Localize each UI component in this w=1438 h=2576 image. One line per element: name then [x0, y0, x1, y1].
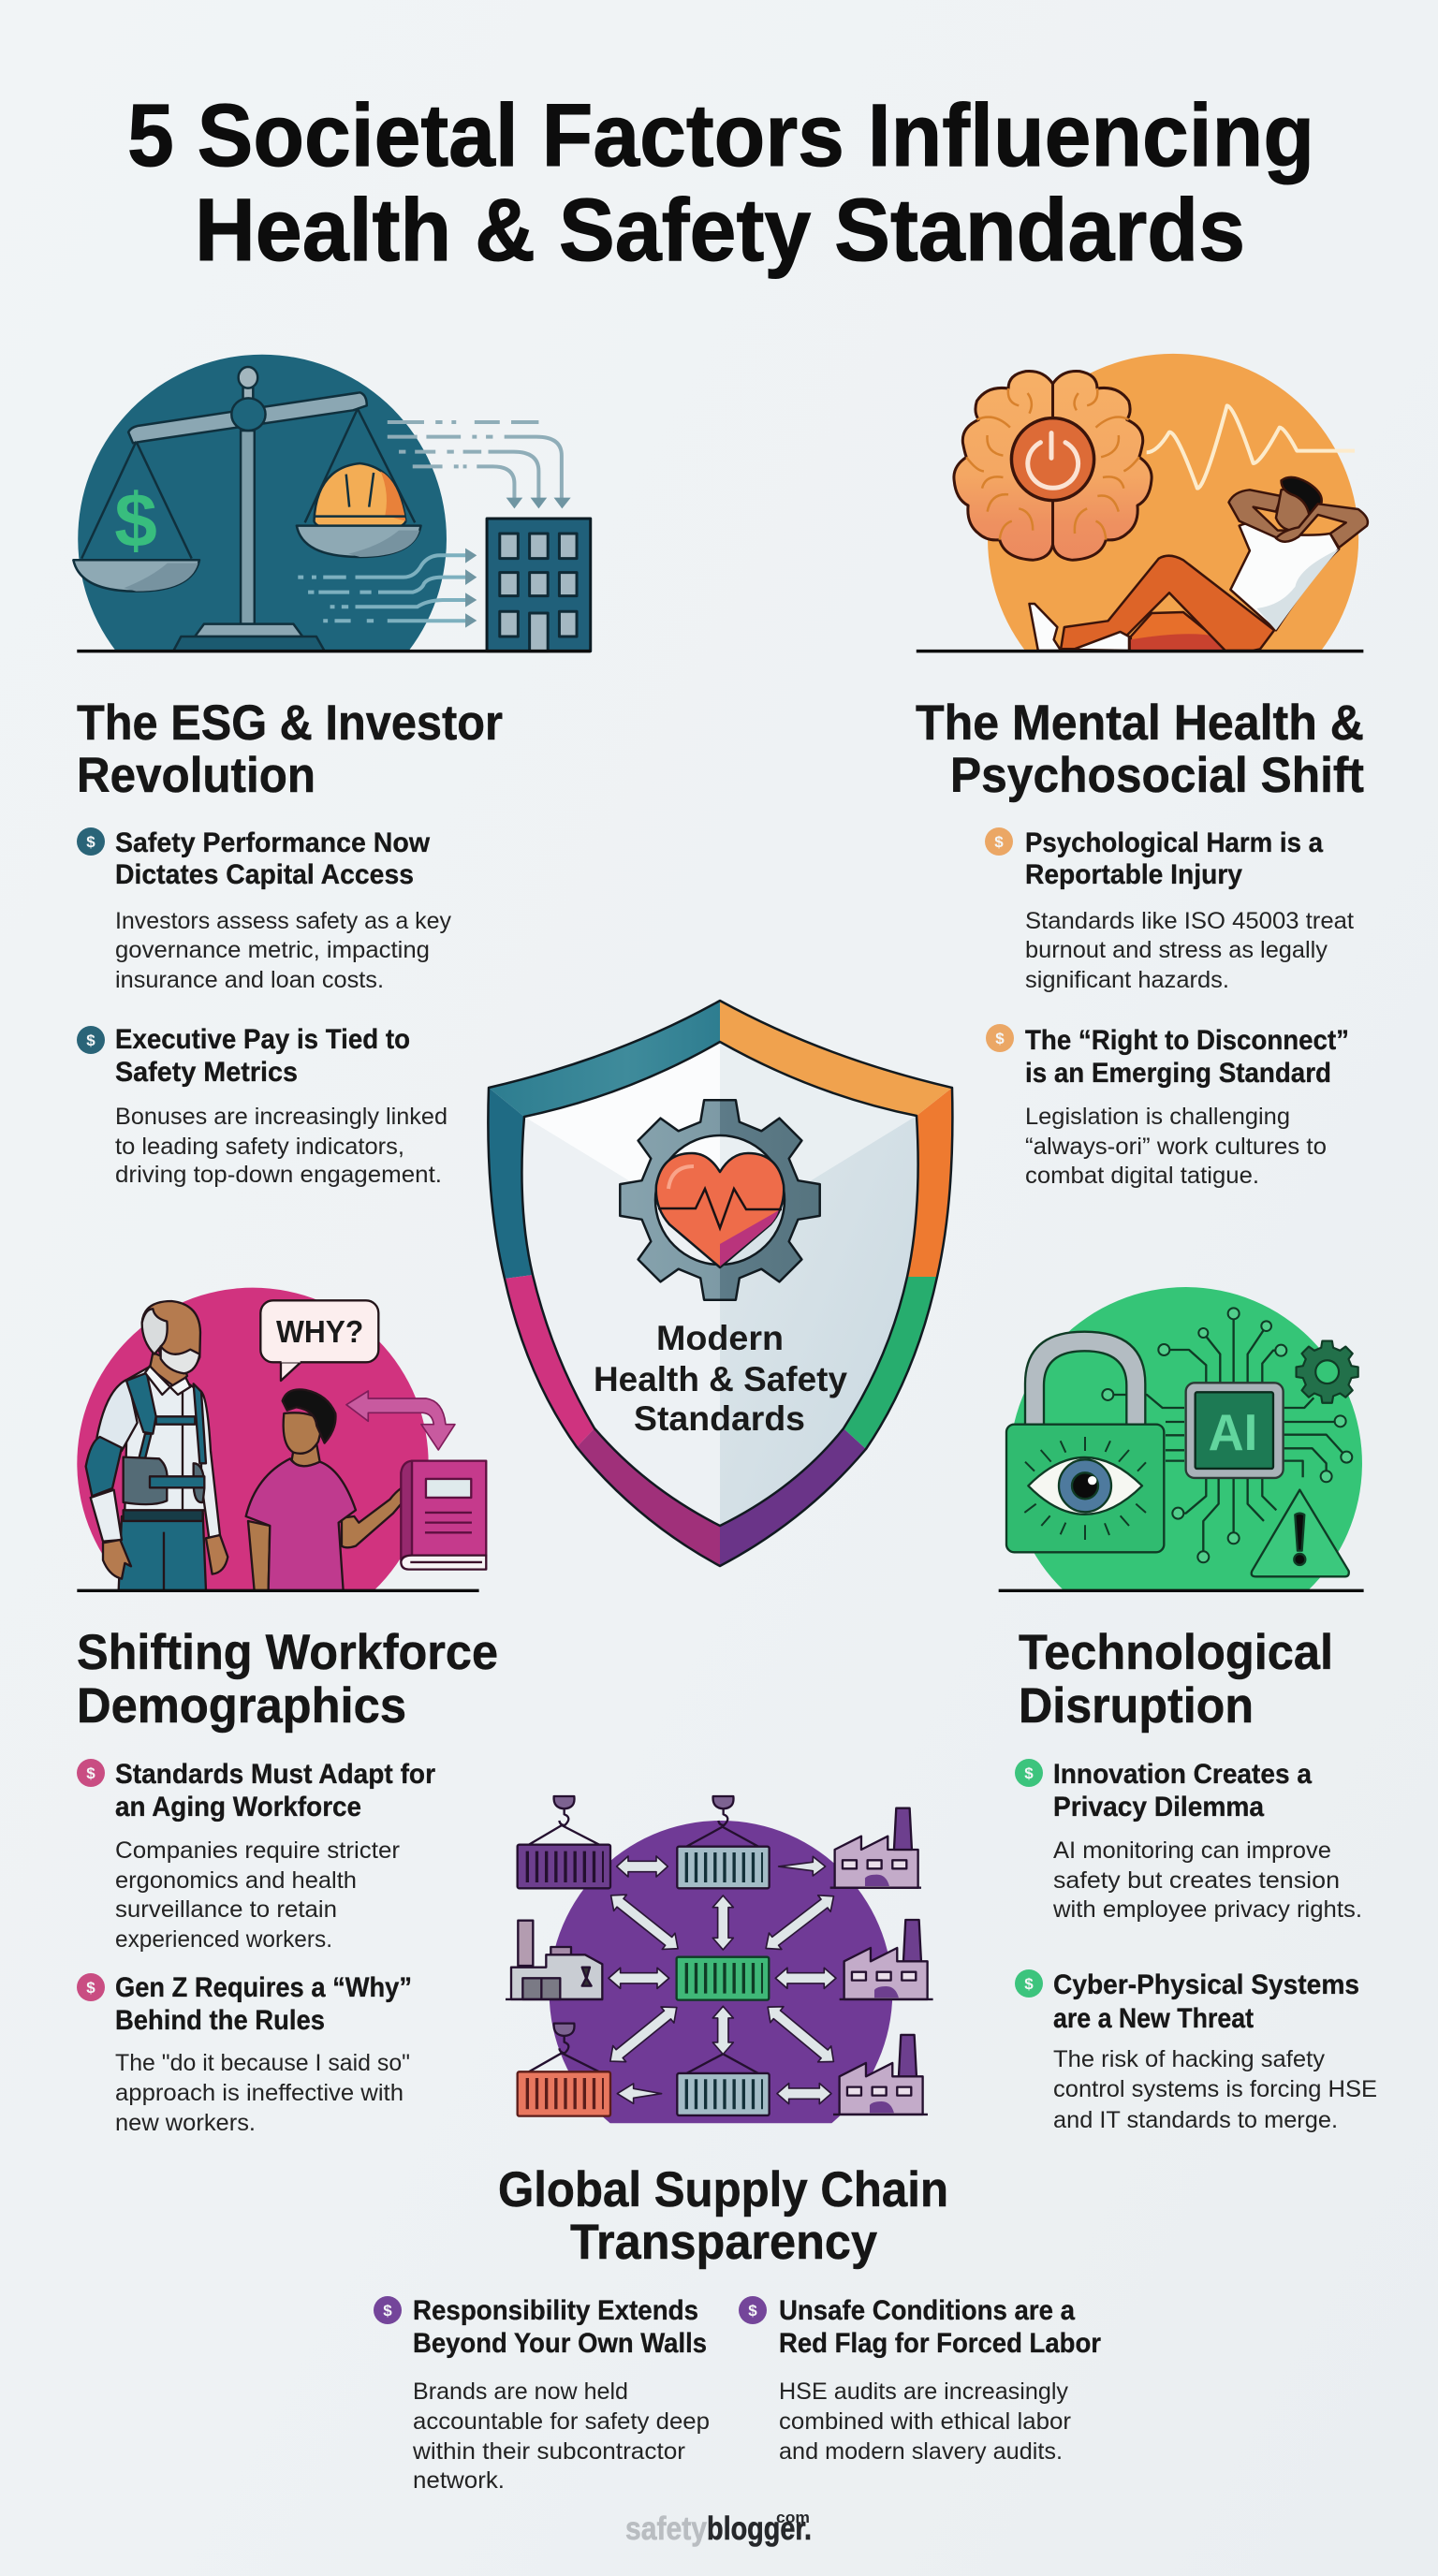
icon: gear with heart — [620, 1100, 820, 1300]
heading: Transparency — [570, 2215, 877, 2270]
item: psychological harm: Standards like ISO 45003 treat — [1025, 908, 1354, 934]
logo: safetyblogger.com: safety — [625, 2510, 707, 2547]
item: psychological harm: significant hazards. — [1025, 967, 1229, 993]
item: aging workforce — [77, 1759, 435, 1953]
heading — [77, 695, 503, 803]
item: cyber-physical systems: control systems is forcing HSE — [1053, 2076, 1377, 2102]
item: aging workforce: Standards Must Adapt for — [115, 1759, 435, 1790]
item: cyber-physical systems: and IT standards to merge. — [1053, 2107, 1338, 2133]
logo: safetyblogger.com: com — [776, 2509, 810, 2526]
item: gen z: $ — [86, 1979, 95, 1997]
title: 5 Societal Factors Influencing — [127, 86, 1314, 185]
item: privacy dilemma: with employee privacy rights. — [1052, 1896, 1362, 1923]
panel: technological disruption — [999, 1287, 1377, 2133]
item: capital access — [77, 827, 451, 993]
item: executive pay: $ — [86, 1032, 95, 1049]
item: gen z: approach is ineffective with — [115, 2080, 404, 2106]
panel: ESG and investor revolution — [73, 355, 591, 1188]
item: gen z: new workers. — [115, 2110, 256, 2136]
item: psychological harm — [985, 827, 1354, 993]
item: right to disconnect: is an Emerging Standard — [1025, 1058, 1331, 1089]
item: gen z: The "do it because I said so" — [115, 2050, 410, 2076]
heading — [77, 1625, 498, 1734]
text: modern health and safety standards — [594, 1319, 847, 1438]
item: responsibility beyond walls: network. — [413, 2467, 505, 2494]
item: responsibility beyond walls: Responsibility Extends — [413, 2295, 698, 2326]
logo: safetyblogger.com: blogger. — [707, 2510, 812, 2547]
heading: The ESG & Investor — [77, 695, 503, 751]
title — [127, 86, 1314, 280]
item: executive pay: to leading safety indicators, — [115, 1134, 404, 1160]
item: privacy dilemma — [1015, 1759, 1362, 1923]
item: capital access: Dictates Capital Access — [115, 859, 414, 890]
illustration: containers and factories network — [506, 1796, 933, 2123]
item: psychological harm: burnout and stress as legally — [1025, 937, 1328, 963]
item: capital access: Investors assess safety as a key — [115, 908, 451, 934]
heading — [1019, 1625, 1333, 1734]
item: psychological harm: Reportable Injury — [1025, 859, 1242, 890]
logo: safetyblogger.com — [625, 2509, 812, 2547]
item: right to disconnect: Legislation is challenging — [1025, 1104, 1290, 1130]
item: right to disconnect: $ — [995, 1030, 1005, 1047]
illustration: scale weighing money against safety with building — [73, 355, 591, 651]
item: cyber-physical systems — [1015, 1969, 1377, 2133]
item: aging workforce: experienced workers. — [115, 1926, 332, 1953]
item: forced labor: Red Flag for Forced Labor — [779, 2328, 1101, 2359]
heading: Technological — [1019, 1625, 1333, 1680]
text: modern health and safety standards: Standards — [634, 1399, 805, 1438]
item: psychological harm: $ — [994, 833, 1004, 851]
item: aging workforce: an Aging Workforce — [115, 1792, 361, 1822]
heading: Shifting Workforce — [77, 1625, 498, 1680]
illustration: older worker with exoskeleton and young worker asking why — [77, 1288, 486, 1590]
heading: Demographics — [77, 1678, 406, 1734]
item: forced labor: and modern slavery audits. — [779, 2438, 1063, 2465]
item: responsibility beyond walls: accountable for safety deep — [413, 2408, 710, 2435]
heading: Revolution — [77, 748, 315, 803]
item: right to disconnect: “always-ori” work cultures to — [1025, 1134, 1327, 1160]
title: Health & Safety Standards — [195, 181, 1245, 280]
illustration: brain with power button and relaxing person — [917, 354, 1368, 651]
item: capital access: insurance and loan costs. — [115, 967, 384, 993]
item: right to disconnect — [986, 1024, 1349, 1189]
item: psychological harm: Psychological Harm is a — [1025, 827, 1323, 858]
item: capital access: $ — [86, 833, 95, 851]
item: aging workforce: Companies require stricter — [115, 1837, 400, 1864]
panel: global supply chain transparency — [374, 1796, 1101, 2494]
item: privacy dilemma: AI monitoring can improve — [1053, 1837, 1331, 1864]
item: cyber-physical systems: Cyber-Physical Systems — [1053, 1969, 1359, 2000]
item: responsibility beyond walls: within their subcontractor — [412, 2438, 685, 2465]
item: capital access: Safety Performance Now — [115, 827, 431, 858]
illustration: older worker with exoskeleton and young worker asking why: WHY? — [276, 1315, 363, 1350]
heading: Disruption — [1019, 1678, 1254, 1734]
item: aging workforce: $ — [86, 1764, 95, 1782]
item: gen z — [77, 1972, 412, 2136]
item: capital access: governance metric, impacting — [115, 937, 430, 963]
item: executive pay: Bonuses are increasingly linked — [115, 1104, 448, 1130]
illustration: padlock with eye, AI chip, gear and warning triangle — [999, 1287, 1364, 1590]
illustration: padlock with eye, AI chip, gear and warning triangle: AI — [1209, 1403, 1257, 1461]
item: responsibility beyond walls: Beyond Your Own Walls — [413, 2328, 707, 2359]
item: executive pay — [77, 1024, 448, 1188]
panel: shifting workforce demographics — [77, 1288, 498, 2136]
item: responsibility beyond walls — [374, 2295, 710, 2494]
item: privacy dilemma: $ — [1024, 1764, 1034, 1782]
heading — [916, 695, 1364, 803]
text: modern health and safety standards: Health & Safety — [594, 1360, 847, 1398]
item: gen z: Gen Z Requires a “Why” — [115, 1972, 412, 2003]
item: aging workforce: surveillance to retain — [115, 1896, 337, 1923]
item: responsibility beyond walls: Brands are now held — [413, 2378, 628, 2405]
item: cyber-physical systems: $ — [1024, 1975, 1034, 1993]
item: forced labor: Unsafe Conditions are a — [779, 2295, 1075, 2326]
item: right to disconnect: combat digital tatigue. — [1025, 1163, 1259, 1189]
heading — [498, 2162, 948, 2270]
item: responsibility beyond walls: $ — [383, 2302, 392, 2320]
shield frame — [488, 1001, 952, 1566]
text: modern health and safety standards: Modern — [656, 1319, 784, 1357]
item: forced labor — [739, 2295, 1101, 2465]
item: gen z: Behind the Rules — [115, 2005, 325, 2036]
item: forced labor: $ — [748, 2302, 757, 2320]
item: privacy dilemma: safety but creates tension — [1053, 1867, 1340, 1894]
panel: central shield — [488, 1001, 952, 1566]
item: executive pay: driving top-down engagement. — [115, 1162, 442, 1188]
item: executive pay: Safety Metrics — [115, 1057, 298, 1088]
item: cyber-physical systems: are a New Threat — [1053, 2003, 1254, 2034]
heading: The Mental Health & — [916, 695, 1364, 751]
item: aging workforce: ergonomics and health — [115, 1867, 357, 1894]
heading: Global Supply Chain — [498, 2162, 948, 2217]
heading: Psychosocial Shift — [950, 748, 1364, 803]
item: forced labor: HSE audits are increasingly — [779, 2378, 1069, 2405]
item: privacy dilemma: Innovation Creates a — [1053, 1759, 1312, 1790]
panel: mental health and psychosocial shift — [916, 354, 1368, 1189]
icon: dollar sign: $ — [114, 478, 157, 564]
item: cyber-physical systems: The risk of hacking safety — [1053, 2046, 1326, 2072]
item: privacy dilemma: Privacy Dilemma — [1053, 1792, 1264, 1822]
item: right to disconnect: The “Right to Disconnect” — [1025, 1025, 1349, 1056]
item: forced labor: combined with ethical labor — [779, 2408, 1071, 2435]
item: executive pay: Executive Pay is Tied to — [115, 1024, 410, 1055]
